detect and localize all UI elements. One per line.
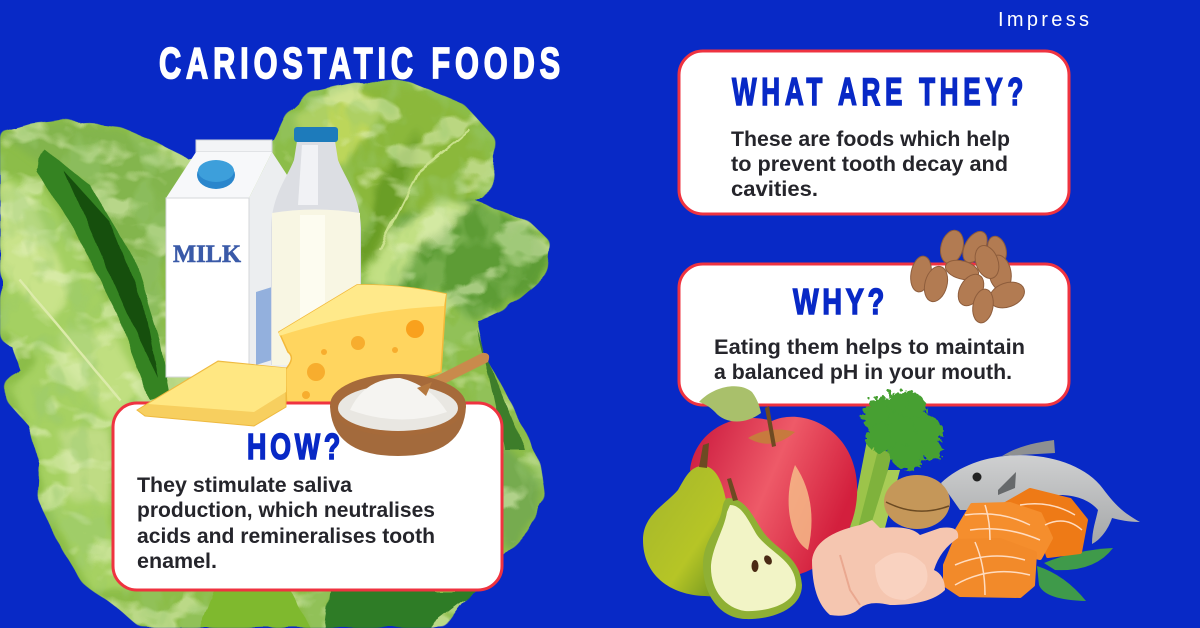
brand: impress: Impress xyxy=(998,9,1089,31)
bottle cap xyxy=(294,127,338,142)
cheese wedge xyxy=(279,285,446,411)
herb leaves xyxy=(1037,548,1113,601)
cheese slices xyxy=(137,361,286,426)
panel: how xyxy=(113,403,502,590)
apple leaf xyxy=(699,386,761,422)
yogurt bowl xyxy=(330,353,489,456)
how body text: enamel. xyxy=(137,550,217,573)
apple xyxy=(690,386,857,574)
almonds xyxy=(908,227,1028,324)
why body text: a balanced pH in your mouth. xyxy=(714,361,1012,384)
carton spout xyxy=(197,161,235,189)
lettuce illustration xyxy=(0,80,550,628)
heading: how: HOW? xyxy=(247,426,344,467)
pear half xyxy=(703,478,802,619)
milk carton xyxy=(166,140,292,377)
how body text: acids and remineralises tooth xyxy=(137,525,435,548)
food group xyxy=(643,386,1140,619)
how body text: production, which neutralises xyxy=(137,499,435,522)
MILK label: MILK xyxy=(173,241,242,268)
walnut xyxy=(884,475,950,529)
pear whole xyxy=(643,443,732,598)
heading: why: WHY? xyxy=(793,281,888,322)
why body text: Eating them helps to maintain xyxy=(714,336,1025,359)
how body text xyxy=(137,474,435,573)
salmon xyxy=(945,490,1086,596)
what body text: These are foods which help xyxy=(731,128,1010,151)
how body text: They stimulate saliva xyxy=(137,474,352,497)
chicken xyxy=(812,520,958,616)
what body text: to prevent tooth decay and xyxy=(731,153,1008,176)
panel: what are they xyxy=(679,51,1069,214)
what body text: cavities. xyxy=(731,178,818,201)
heading: what are they: WHAT ARE THEY? xyxy=(732,71,1028,114)
milk bottle xyxy=(271,127,361,365)
title: CARIOSTATIC FOODS xyxy=(159,39,565,88)
panel: why xyxy=(679,264,1069,405)
why body text xyxy=(714,336,1025,384)
what body text xyxy=(731,128,1010,201)
fish xyxy=(941,440,1140,544)
celery xyxy=(850,388,940,528)
